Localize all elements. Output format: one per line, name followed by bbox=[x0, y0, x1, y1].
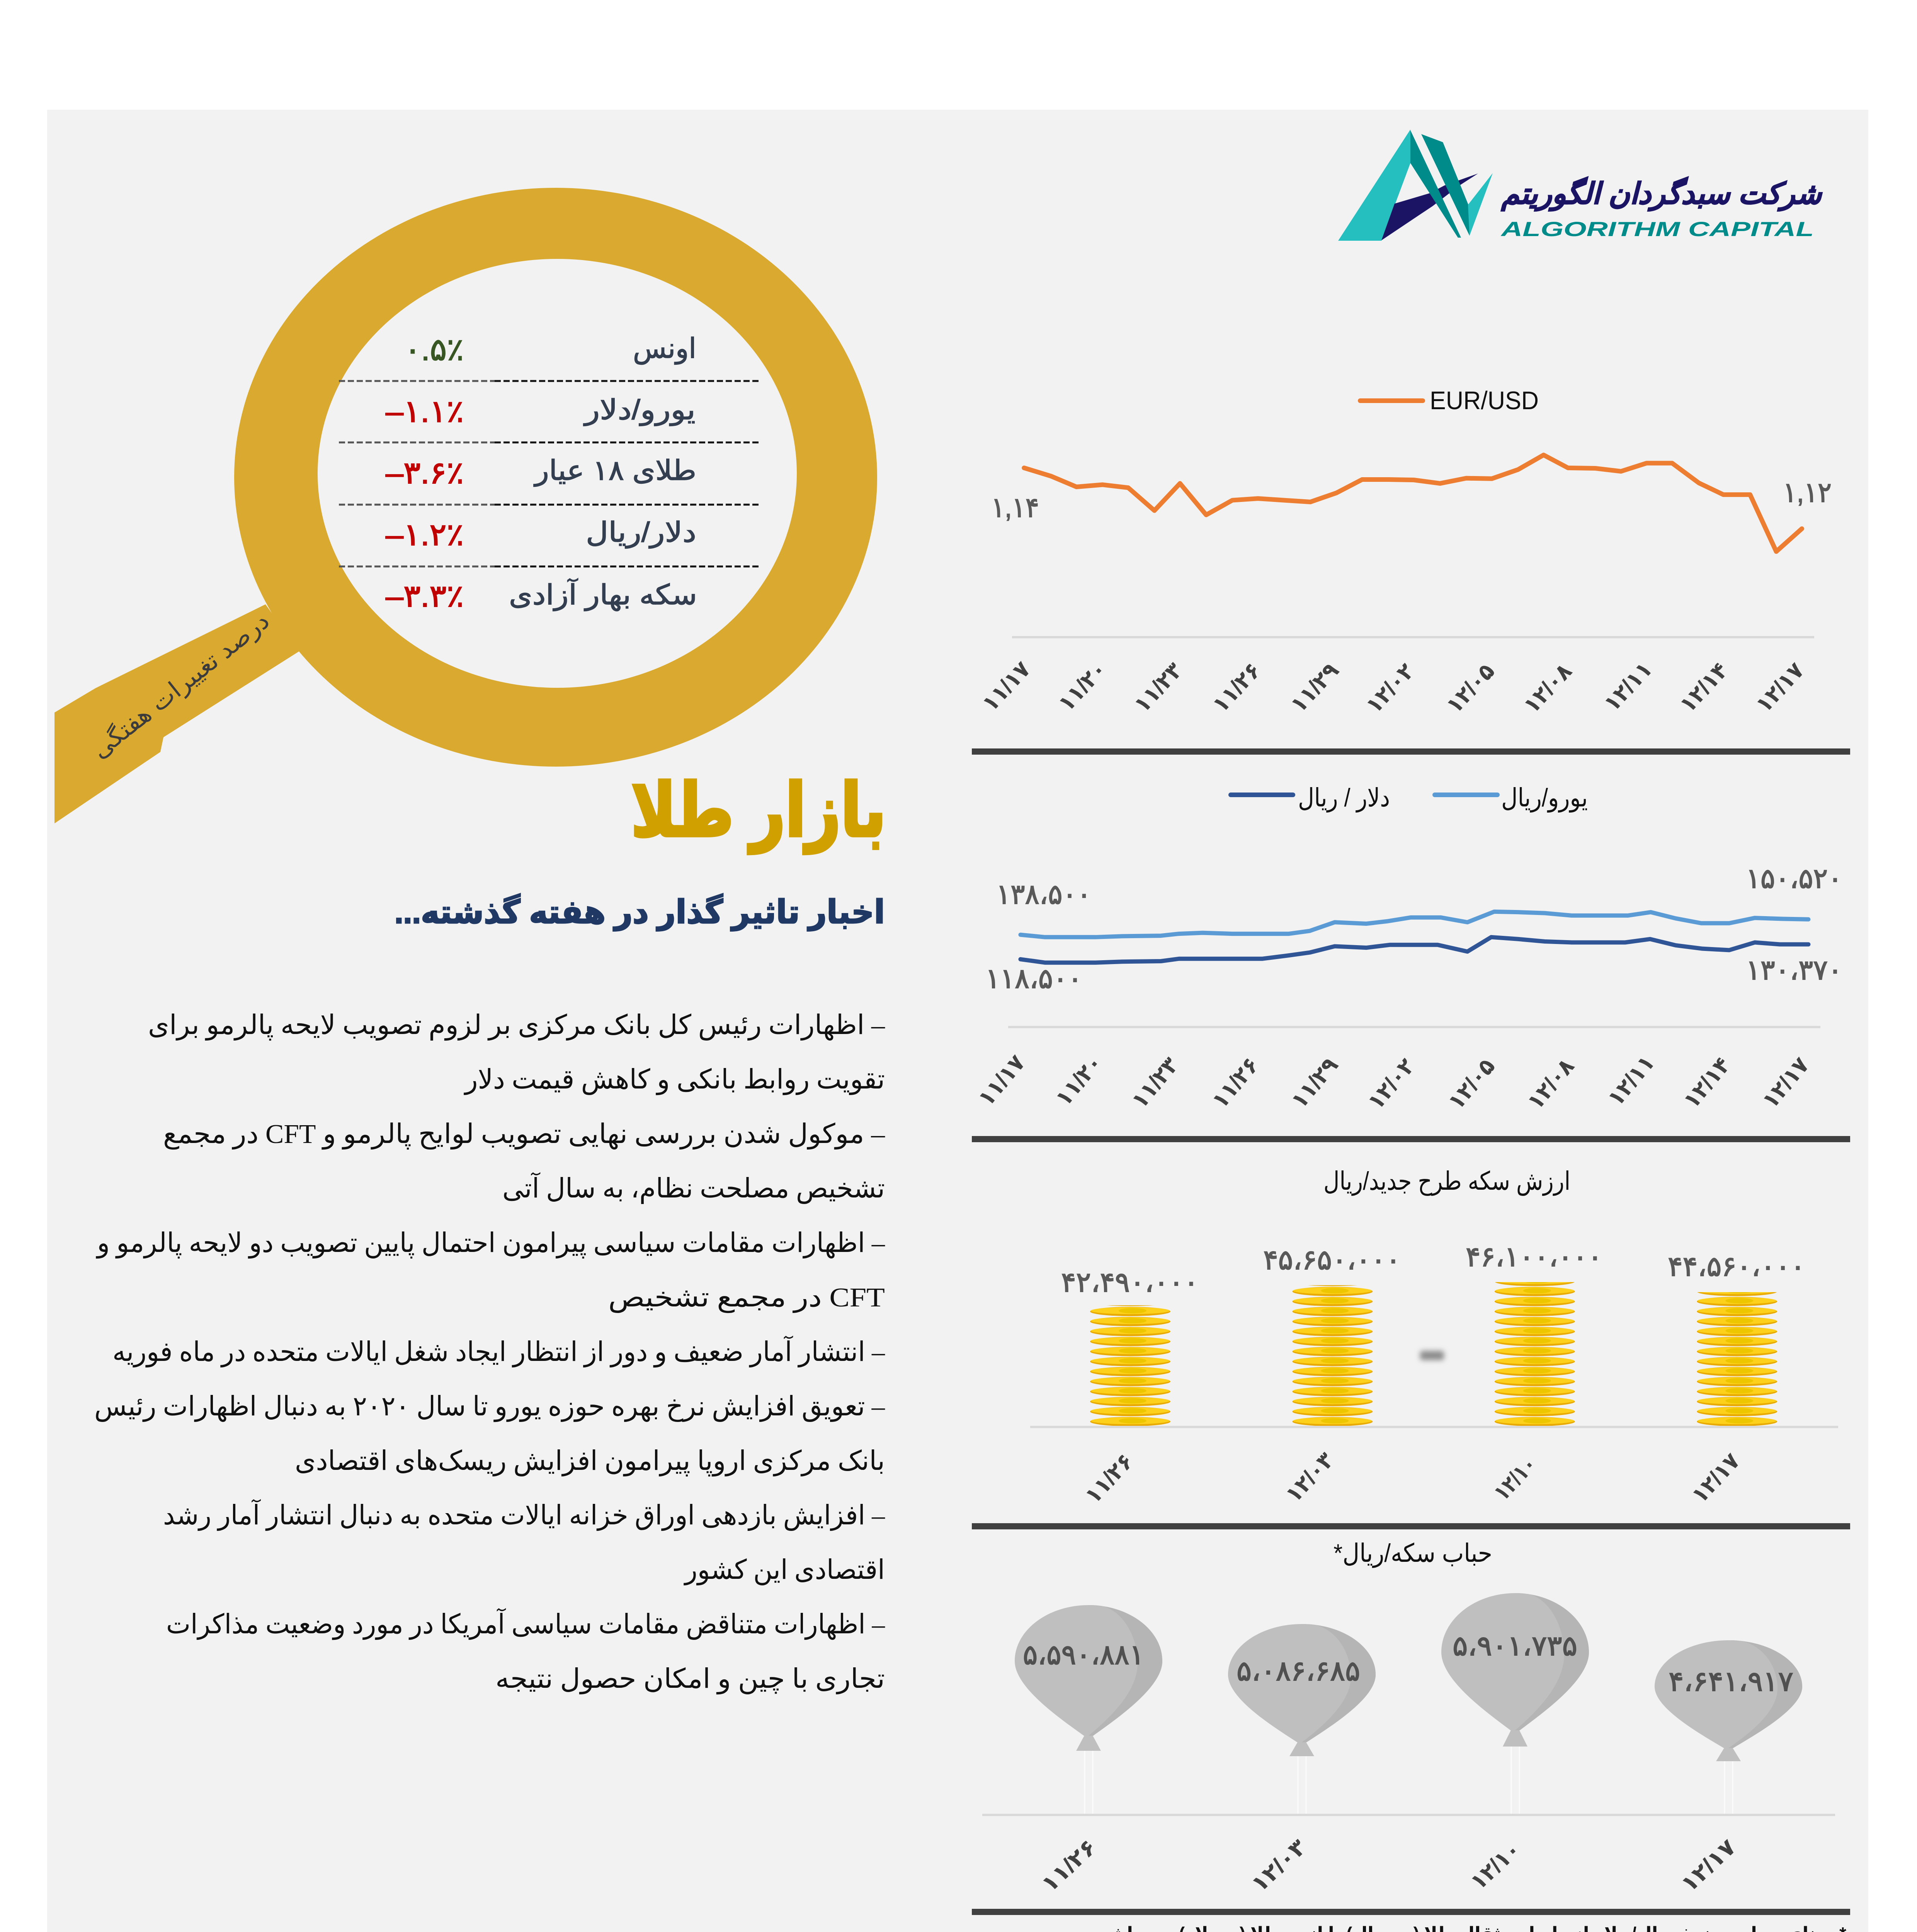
subtitle: اخبار تاثیر گذار در هفته گذشته... bbox=[395, 893, 885, 931]
row: bahar azadi coin bbox=[386, 578, 697, 613]
chart title: حباب سکه/ریال* bbox=[1334, 1539, 1492, 1568]
x axis labels: ۱۲/۰۳ bbox=[1281, 1447, 1339, 1507]
row: ounce bbox=[404, 332, 696, 367]
x axis labels bbox=[977, 656, 1809, 718]
bubble values: ۵،۹۰۱،۷۳۵ bbox=[1453, 1631, 1577, 1662]
news list: – موکول شدن بررسی نهایی تصویب لوایح پالرمو و CFT در مجمع bbox=[163, 1119, 885, 1150]
chart title: ارزش سکه طرح جدید/ریال bbox=[1323, 1167, 1570, 1196]
legend: یورو/ریال bbox=[1501, 783, 1588, 813]
first value: ۱,۱۴ bbox=[991, 492, 1039, 523]
chart: coin bubble balloons bbox=[982, 1539, 1835, 1897]
logo bbox=[1338, 129, 1822, 241]
row: dollar rial bbox=[386, 517, 696, 552]
x axis labels: ۱۲/۰۵ bbox=[1441, 658, 1499, 718]
balloon 4 bbox=[1655, 1640, 1802, 1814]
x axis labels bbox=[1037, 1834, 1741, 1897]
x axis labels: ۱۲/۱۷ bbox=[1757, 1053, 1814, 1113]
chart: EUR/USD line bbox=[977, 386, 1832, 718]
x axis labels: ۱۲/۱۷ bbox=[1676, 1834, 1741, 1897]
x axis labels: ۱۱/۲۳ bbox=[1129, 658, 1187, 717]
x axis labels: ۱۲/۱۰ bbox=[1466, 1837, 1525, 1895]
row: bahar azadi coin: سکه بهار آزادی bbox=[509, 578, 697, 611]
row: 18 carat gold bbox=[386, 455, 696, 490]
x axis labels: ۱۲/۱۷ bbox=[1687, 1448, 1745, 1508]
news list: – تعویق افزایش نرخ بهره حوزه یورو تا سال ۲۰۲۰ به دنبال اظهارات رئیس bbox=[94, 1392, 885, 1422]
row: 18 carat gold: –۳.۶٪ bbox=[386, 456, 464, 490]
balloon 3 bbox=[1441, 1593, 1589, 1814]
row: euro dollar: یورو/دلار bbox=[583, 395, 696, 426]
x axis labels: ۱۲/۰۳ bbox=[1247, 1834, 1311, 1897]
news list: تقویت روابط بانکی و کاهش قیمت دلار bbox=[464, 1065, 885, 1095]
x axis labels: ۱۲/۱۱ bbox=[1603, 1050, 1659, 1111]
row: euro dollar: –۱.۱٪ bbox=[386, 394, 464, 429]
coin values: ۴۵،۶۵۰،۰۰۰ bbox=[1263, 1245, 1401, 1276]
coin values: ۴۲،۴۹۰،۰۰۰ bbox=[1061, 1267, 1199, 1298]
value labels: ۱۵۰،۵۲۰ bbox=[1746, 863, 1842, 894]
x axis labels: ۱۲/۰۸ bbox=[1519, 658, 1577, 718]
x axis labels: ۱۲/۱۷ bbox=[1751, 658, 1809, 717]
news list: – اظهارات مقامات سیاسی پیرامون احتمال پایین تصویب دو لایحه پالرمو و bbox=[96, 1228, 885, 1259]
bubble values: ۴،۶۴۱،۹۱۷ bbox=[1669, 1666, 1793, 1697]
x axis labels: ۱۲/۱۴ bbox=[1675, 658, 1733, 717]
row: ounce: ۰.۵٪ bbox=[404, 332, 464, 367]
news list: بانک مرکزی اروپا پیرامون افزایش ریسک‌های اقتصادی bbox=[295, 1446, 885, 1477]
balloon 1 bbox=[1015, 1605, 1162, 1814]
logo persian name: شرکت سبدگردان الگوریتم bbox=[1501, 177, 1822, 211]
x axis labels: ۱۱/۲۳ bbox=[1127, 1053, 1183, 1113]
x axis labels: ۱۲/۱۱ bbox=[1599, 656, 1657, 716]
x axis labels: ۱۱/۲۶ bbox=[1207, 1053, 1264, 1113]
EUR/USD series bbox=[1024, 455, 1802, 551]
news list: تشخیص مصلحت نظام، به سال آتی bbox=[502, 1172, 885, 1204]
title: بازار طلا bbox=[631, 770, 886, 854]
x axis labels: ۱۱/۲۶ bbox=[1208, 658, 1266, 717]
row: dollar rial: –۱.۲٪ bbox=[386, 517, 464, 552]
logo latin name: ALGORITHM CAPITAL bbox=[1500, 218, 1814, 241]
magnifier ring bbox=[234, 188, 877, 767]
x axis labels: ۱۲/۰۵ bbox=[1443, 1054, 1500, 1114]
last value: ۱,۱۲ bbox=[1783, 477, 1832, 508]
row: dollar rial: دلار/ریال bbox=[586, 517, 696, 549]
x axis labels: ۱۲/۰۲ bbox=[1363, 1054, 1419, 1114]
chart: dollar and euro to rial lines bbox=[973, 783, 1842, 1114]
x axis labels: ۱۲/۰۲ bbox=[1361, 658, 1419, 718]
coin values bbox=[1061, 1242, 1805, 1298]
x axis labels: ۱۱/۲۰ bbox=[1053, 656, 1111, 716]
legend: EUR/USD bbox=[1430, 386, 1539, 415]
news list: – افزایش بازدهی اوراق خزانه ایالات متحده به دنبال انتشار آمار رشد bbox=[163, 1499, 885, 1531]
row: bahar azadi coin: –۳.۳٪ bbox=[386, 579, 464, 613]
news list: – انتشار آمار ضعیف و دور از انتظار ایجاد شغل ایالات متحده در ماه فوریه bbox=[112, 1335, 885, 1368]
blurred dash mark bbox=[1420, 1351, 1444, 1360]
value labels bbox=[985, 863, 1842, 994]
magnifier lens bbox=[318, 259, 797, 688]
magnifier: weekly change table bbox=[54, 188, 877, 823]
news list: – اظهارات رئیس کل بانک مرکزی بر لزوم تصویب لایحه پالرمو برای bbox=[148, 1010, 885, 1041]
bubble values: ۵،۰۸۶،۶۸۵ bbox=[1237, 1656, 1360, 1687]
value labels: ۱۳۸،۵۰۰ bbox=[996, 879, 1091, 910]
x axis labels: ۱۲/۰۸ bbox=[1522, 1054, 1579, 1114]
bubble values: ۵،۵۹۰،۸۸۱ bbox=[1023, 1639, 1144, 1670]
x axis labels bbox=[973, 1050, 1814, 1114]
news list bbox=[94, 1010, 885, 1695]
legend bbox=[1231, 783, 1588, 813]
x axis labels bbox=[1080, 1447, 1745, 1508]
handle caption: درصد تغییرات هفتگی bbox=[87, 607, 275, 764]
bubble values bbox=[1023, 1631, 1793, 1697]
balloon 2 bbox=[1228, 1624, 1376, 1814]
x axis labels: ۱۲/۱۴ bbox=[1679, 1053, 1735, 1113]
news list: تجاری با چین و امکان حصول نتیجه bbox=[495, 1664, 885, 1695]
value labels: ۱۳۰،۳۷۰ bbox=[1746, 955, 1842, 986]
legend: دلار / ریال bbox=[1298, 783, 1390, 813]
coin values: ۴۶،۱۰۰،۰۰۰ bbox=[1466, 1242, 1602, 1272]
x axis labels: ۱۱/۱۷ bbox=[973, 1050, 1030, 1111]
x axis labels: ۱۱/۲۶ bbox=[1080, 1449, 1138, 1508]
row: euro dollar bbox=[386, 394, 696, 429]
logo mark bbox=[1338, 129, 1493, 241]
x axis labels: ۱۱/۲۹ bbox=[1286, 1053, 1343, 1113]
x axis labels: ۱۱/۱۷ bbox=[977, 656, 1035, 716]
news list: – اظهارات متناقض مقامات سیاسی آمریکا در مورد وضعیت مذاکرات bbox=[166, 1608, 885, 1640]
euro and dollar series bbox=[1021, 912, 1808, 963]
row: 18 carat gold: طلای ۱۸ عیار bbox=[534, 455, 696, 487]
magnifier handle bbox=[54, 604, 299, 823]
coin stacks bbox=[1090, 1282, 1777, 1426]
x axis labels: ۱۱/۲۰ bbox=[1051, 1050, 1107, 1111]
row: ounce: اونس bbox=[633, 333, 696, 365]
news list: اقتصادی این کشور bbox=[684, 1555, 885, 1585]
x axis labels: ۱۲/۱۰ bbox=[1489, 1452, 1541, 1505]
x axis labels: ۱۱/۲۹ bbox=[1286, 658, 1344, 717]
coin values: ۴۴،۵۶۰،۰۰۰ bbox=[1668, 1251, 1805, 1282]
value labels: ۱۱۸،۵۰۰ bbox=[985, 963, 1082, 994]
chart: coin value stacks bbox=[1030, 1167, 1838, 1508]
x axis labels: ۱۱/۲۶ bbox=[1037, 1834, 1101, 1897]
news list: CFT در مجمع تشخیص bbox=[608, 1283, 885, 1313]
